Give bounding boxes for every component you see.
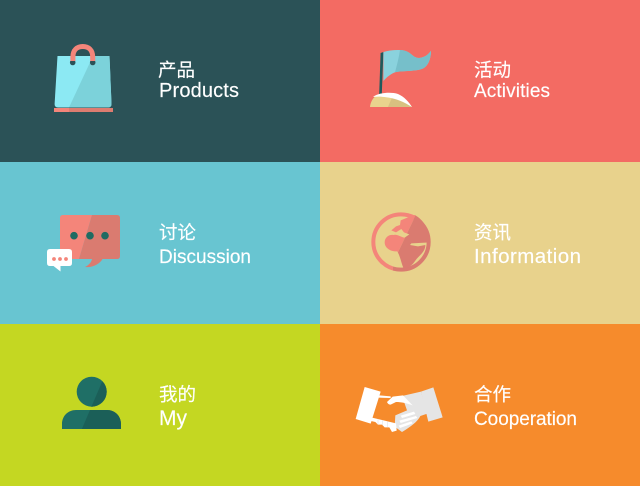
icon: handshake bbox=[356, 387, 443, 432]
panel: information bbox=[320, 162, 640, 324]
heading: activities: 活动 bbox=[474, 60, 511, 80]
heading: products: 产品 bbox=[158, 60, 195, 80]
heading: discussion bbox=[159, 222, 251, 268]
icon: globe bbox=[373, 214, 430, 270]
heading: activities bbox=[474, 60, 550, 102]
icon: shopping bag bbox=[54, 46, 113, 112]
heading: discussion: 讨论 bbox=[159, 222, 197, 243]
heading: cooperation: 合作 bbox=[474, 384, 511, 405]
heading: my: 我的 bbox=[159, 384, 196, 405]
panel: activities bbox=[320, 0, 640, 162]
heading: cooperation: Cooperation bbox=[474, 409, 577, 430]
heading: my bbox=[159, 384, 196, 430]
panel: products bbox=[0, 0, 320, 162]
heading: cooperation bbox=[474, 384, 577, 430]
heading: my: My bbox=[159, 407, 188, 430]
panel: cooperation bbox=[320, 324, 640, 486]
heading: information: Information bbox=[474, 245, 581, 268]
heading: products: Products bbox=[159, 80, 239, 102]
icon: flag on hill bbox=[370, 50, 431, 107]
heading: products bbox=[158, 60, 239, 102]
icon: speech bubbles bbox=[47, 215, 120, 272]
heading: discussion: Discussion bbox=[159, 247, 251, 268]
icon: person bbox=[62, 376, 121, 429]
panel: my bbox=[0, 324, 320, 486]
panel: discussion bbox=[0, 162, 320, 324]
heading: information: 资讯 bbox=[474, 222, 511, 243]
heading: information bbox=[474, 222, 581, 268]
heading: activities: Activities bbox=[474, 81, 550, 102]
